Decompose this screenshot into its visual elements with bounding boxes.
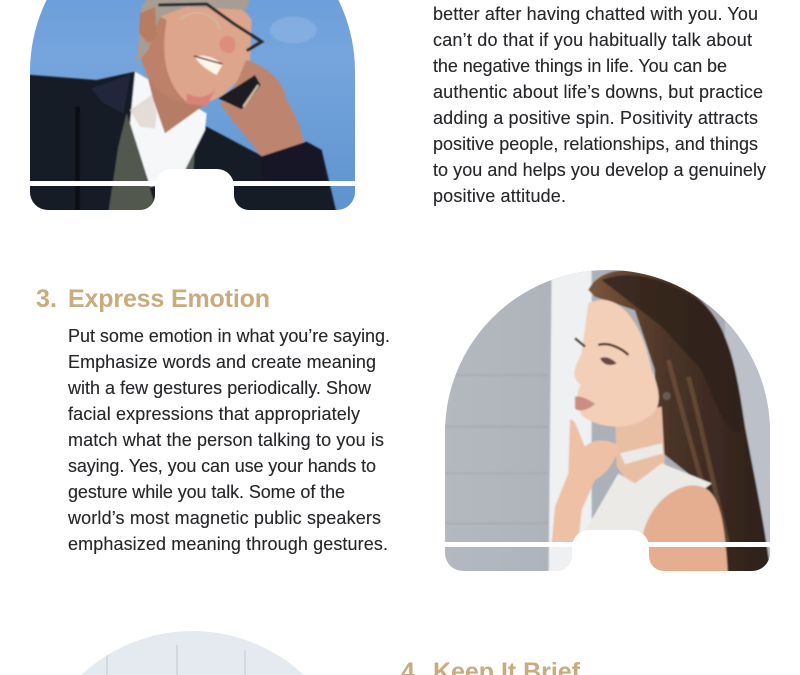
photo: pale arch for point 4 — [82, 631, 304, 675]
hair — [588, 270, 772, 580]
cuff — [260, 142, 323, 158]
text block: point 2 body: can’t do that if you habitually talk about — [433, 30, 752, 50]
heading: 3. Express Emotion: Express Emotion — [68, 285, 270, 313]
shirt — [130, 72, 207, 187]
hand — [552, 420, 620, 543]
dress — [586, 462, 712, 534]
text block: point 3 body: world’s most magnetic public speakers — [67, 508, 381, 528]
waistcoat — [108, 113, 155, 213]
neck and face — [143, 60, 207, 133]
photo: woman with hand at chin — [445, 270, 770, 571]
text block: point 3 body: facial expressions that appropriately — [68, 404, 360, 424]
text block: point 3 body: gesture while you talk. Some of the — [68, 482, 345, 502]
text block: point 2 body: authentic about life’s downs, but practice — [433, 82, 763, 102]
text block: point 3 body: saying. Yes, you can use your hands to — [68, 456, 376, 476]
text block: point 2 body: positive people, relationships, and things — [433, 134, 758, 154]
heading: 3. Express Emotion: 3. — [36, 285, 57, 313]
band and notch — [30, 181, 355, 186]
text block: point 2 body: the negative things in life. You can be — [433, 56, 727, 76]
text block: point 2 body — [433, 4, 766, 206]
face — [575, 300, 659, 427]
coat — [20, 72, 337, 213]
phone — [218, 75, 261, 109]
text block: point 3 body: match what the person talking to you is — [68, 430, 384, 450]
text block: point 3 body: Put some emotion in what you’re saying. — [68, 326, 390, 346]
text block: point 2 body: adding a positive spin. Positivity attracts — [433, 108, 758, 128]
hair — [137, 0, 250, 63]
photo: smiling man on phone — [20, 0, 355, 213]
glasses — [158, 4, 262, 51]
hand — [220, 60, 303, 157]
text block: point 2 body: to you and helps you develop a genuinely — [433, 160, 766, 180]
text block: point 2 body: better after having chatted with you. You — [433, 4, 758, 24]
choker — [620, 443, 663, 464]
smile — [195, 56, 222, 75]
light wall band — [548, 260, 592, 593]
text block: point 3 body: with a few gestures periodically. Show — [67, 378, 372, 398]
text block: point 3 body — [67, 326, 390, 554]
band and notch — [445, 542, 770, 547]
text block: point 3 body: Emphasize words and create meaning — [68, 352, 376, 372]
text block: point 2 body: positive attitude. — [433, 186, 566, 206]
shoulder — [642, 484, 729, 571]
text block: point 3 body: emphasized meaning through gestures. — [68, 534, 388, 554]
neck — [615, 407, 665, 487]
